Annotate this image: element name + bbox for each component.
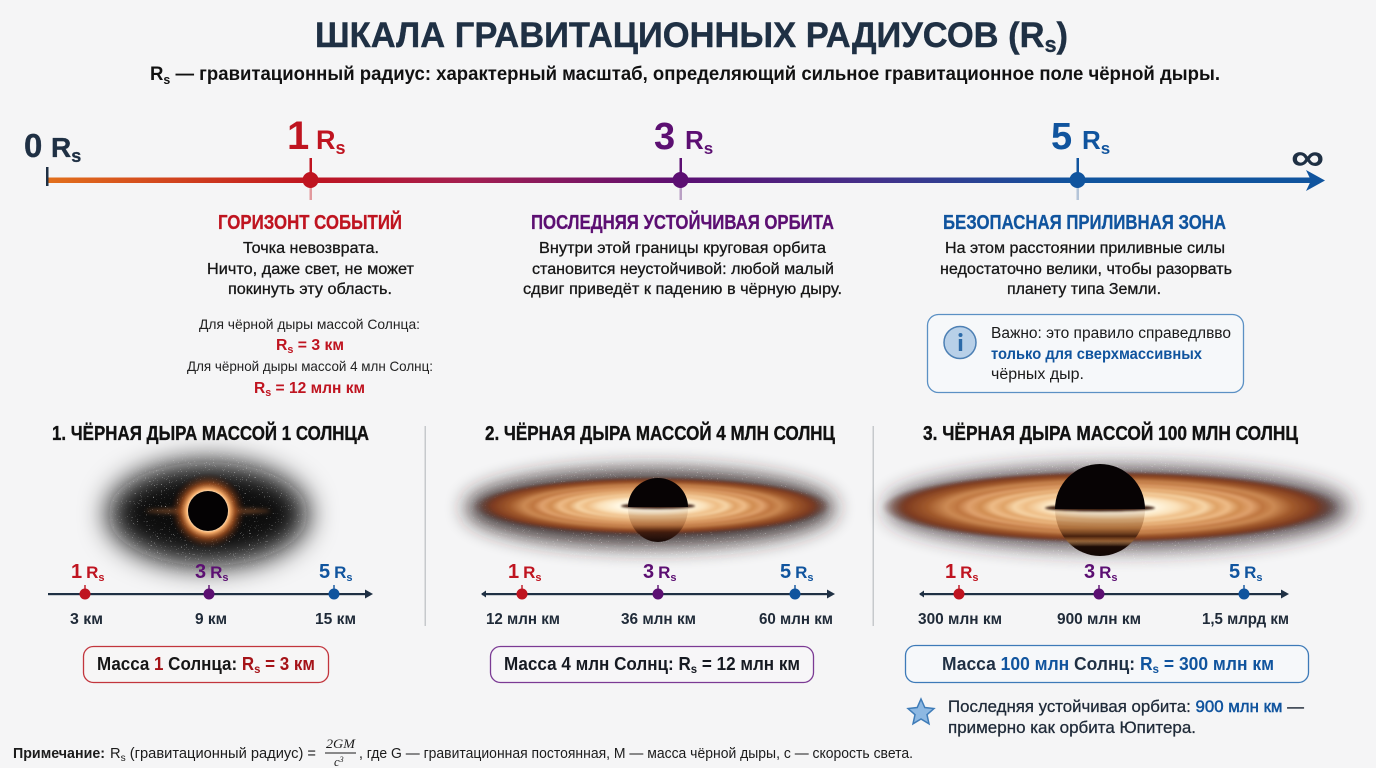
scale label 0 Rs: s xyxy=(71,146,81,166)
panel 3: axis: 1R xyxy=(945,561,972,583)
panel 3: axis: 300 млн км xyxy=(918,611,1002,628)
orbit note: Последняя устойчивая орбита: 900 млн км — xyxy=(948,697,1304,716)
callout: important note: чёрных дыр. xyxy=(991,366,1084,383)
column: event horizon: Для чёрной дыры массой 4 млн Солнц: xyxy=(187,358,433,374)
orbit note xyxy=(948,697,1304,737)
footnote: , где G — гравитационная постоянная, M — масса чёрной дыры, c — скорость света. xyxy=(359,746,913,762)
panel 2: black hole image xyxy=(451,452,849,564)
column: safe tidal zone: недостаточно велики, чтобы разорвать xyxy=(940,261,1232,278)
panel 2: axis: 36 млн км xyxy=(621,611,696,628)
column: event horizon xyxy=(187,210,433,399)
title: ) xyxy=(1057,15,1068,55)
panel 3: black hole image xyxy=(874,450,1362,566)
panel 2: mass box: Масса 4 млн Солнц: R xyxy=(504,654,701,674)
callout: important note: только для сверхмассивных xyxy=(991,346,1202,363)
main scale axis xyxy=(46,158,1325,200)
panel 3: axis: 5R xyxy=(1229,561,1256,583)
icon: star xyxy=(908,699,934,724)
panel 1: black hole image xyxy=(90,445,330,585)
scale label 1 Rs: s xyxy=(336,138,346,158)
column: safe tidal zone: На этом расстоянии приливные силы xyxy=(945,240,1225,257)
panel 2: axis: s xyxy=(807,572,814,584)
column: safe tidal zone xyxy=(940,212,1232,298)
panel 3: axis xyxy=(918,561,1289,628)
subtitle: R xyxy=(150,63,164,85)
column: event horizon: s xyxy=(265,387,271,399)
column: event horizon: Для чёрной дыры массой Солнца: xyxy=(199,316,420,332)
footnote: Примечание: xyxy=(13,746,105,762)
scale label 3 Rs: s xyxy=(704,139,713,158)
column: last stable orbit xyxy=(523,210,842,298)
column: event horizon: = 12 млн км xyxy=(271,380,365,397)
footnote: R xyxy=(110,746,120,762)
subtitle: — гравитационный радиус: характерный масштаб, определяющий сильное гравитационное поле чёрной дыры. xyxy=(170,63,1220,85)
panel 3: axis: s xyxy=(972,572,979,584)
panel 1: axis: 3 км xyxy=(70,611,103,628)
column: event horizon: Ничто, даже свет, не может xyxy=(207,261,415,278)
title: s xyxy=(1045,32,1057,57)
panel 1: heading: 1. ЧЁРНАЯ ДЫРА МАССОЙ 1 СОЛНЦА xyxy=(52,421,369,445)
column: event horizon: s xyxy=(287,344,293,356)
panel 1: axis xyxy=(48,561,373,628)
column: last stable orbit: становится неустойчивой: любой малый xyxy=(532,261,834,278)
panel 2: axis: 5R xyxy=(780,561,807,583)
column: event horizon: = 3 км xyxy=(293,337,344,354)
footnote: s xyxy=(121,753,126,764)
scale label 0 Rs: 0 xyxy=(24,127,42,164)
panel 2: axis: 60 млн км xyxy=(759,611,833,628)
footnote: 3 xyxy=(339,755,344,764)
panel 1: axis: s xyxy=(222,572,229,584)
subtitle: s xyxy=(163,72,170,87)
panel 2: axis: 1R xyxy=(508,561,535,583)
scale label 5 Rs: s xyxy=(1101,139,1110,158)
scale label 5 Rs: R xyxy=(1082,125,1101,155)
panel 1: axis: 15 км xyxy=(315,611,356,628)
orbit note: примерно как орбита Юпитера. xyxy=(948,718,1196,737)
panel 2: mass box: s xyxy=(691,662,697,676)
column: event horizon: R xyxy=(276,337,288,354)
panel 1: axis: 1R xyxy=(71,561,98,583)
scale label 1 Rs: 1 xyxy=(287,114,309,158)
panel 1: axis: s xyxy=(98,572,105,584)
column: safe tidal zone: БЕЗОПАСНАЯ ПРИЛИВНАЯ ЗОНА xyxy=(943,212,1226,234)
panel 3: mass box: Масса 100 млн Солнц: R xyxy=(942,654,1153,674)
footnote: (гравитационный радиус) = xyxy=(126,746,316,762)
panel 1: mass box: Масса 1 Солнца: R xyxy=(97,654,255,674)
panel 1: mass box xyxy=(84,646,328,682)
column: last stable orbit: сдвиг приведёт к падению в чёрную дыру. xyxy=(523,281,842,298)
panel 3: mass box xyxy=(906,646,1308,682)
column: last stable orbit: ПОСЛЕДНЯЯ УСТОЙЧИВАЯ ОРБИТА xyxy=(531,210,834,234)
footnote: 2GM xyxy=(326,737,356,751)
panel 3: axis: 900 млн км xyxy=(1057,611,1141,628)
column: event horizon: ГОРИЗОНТ СОБЫТИЙ xyxy=(218,210,402,234)
panel 1: mass box: = 3 км xyxy=(260,654,315,674)
panel 3: axis: s xyxy=(1256,572,1263,584)
panel 1: axis: 5R xyxy=(319,561,346,583)
footnote xyxy=(13,737,913,768)
panel 2: axis xyxy=(481,561,835,628)
scale label 1 Rs: R xyxy=(316,125,336,155)
icon: axis arrowhead xyxy=(1306,170,1325,191)
icon: info xyxy=(944,326,976,358)
panel 3: heading: 3. ЧЁРНАЯ ДЫРА МАССОЙ 100 МЛН СОЛНЦ xyxy=(923,421,1298,445)
scale label 5 Rs: 5 xyxy=(1051,116,1072,158)
divider lines xyxy=(424,426,874,626)
title: ШКАЛА ГРАВИТАЦИОННЫХ РАДИУСОВ (R xyxy=(315,15,1066,55)
panel 2: axis: 12 млн км xyxy=(486,611,560,628)
column: event horizon: покинуть эту область. xyxy=(228,281,392,298)
panel 2: mass box xyxy=(490,646,814,682)
column: event horizon: R xyxy=(254,380,266,397)
panel 1: axis: 3R xyxy=(195,561,222,583)
panel 2: mass box: = 12 млн км xyxy=(697,654,800,674)
callout: important note xyxy=(928,314,1244,392)
scale label 0 Rs: R xyxy=(51,132,71,163)
scale label 3 Rs: R xyxy=(685,125,704,155)
panel 1: mass box: s xyxy=(254,662,261,676)
infinity label: ∞ xyxy=(1291,137,1324,179)
panel 3: mass box: s xyxy=(1153,662,1159,676)
column: event horizon: Точка невозврата. xyxy=(243,240,379,257)
panel 1: axis: s xyxy=(346,572,353,584)
panel 2: axis: s xyxy=(670,572,677,584)
panel 2: axis: s xyxy=(535,572,542,584)
panel 1: axis: 9 км xyxy=(195,611,227,628)
callout: important note: Важно: это правило справедлвво xyxy=(991,325,1231,342)
panel 3: axis: 1,5 млрд км xyxy=(1202,611,1289,628)
panel 3: axis: s xyxy=(1111,572,1118,584)
scale label 3 Rs: 3 xyxy=(654,116,675,158)
column: last stable orbit: Внутри этой границы круговая орбита xyxy=(539,240,826,257)
panel 3: mass box: = 300 млн км xyxy=(1159,654,1274,674)
panel 2: axis: 3R xyxy=(643,561,670,583)
panel 2: heading: 2. ЧЁРНАЯ ДЫРА МАССОЙ 4 МЛН СОЛНЦ xyxy=(485,421,835,445)
panel 3: axis: 3R xyxy=(1084,561,1111,583)
column: safe tidal zone: планету типа Земли. xyxy=(1007,281,1161,298)
